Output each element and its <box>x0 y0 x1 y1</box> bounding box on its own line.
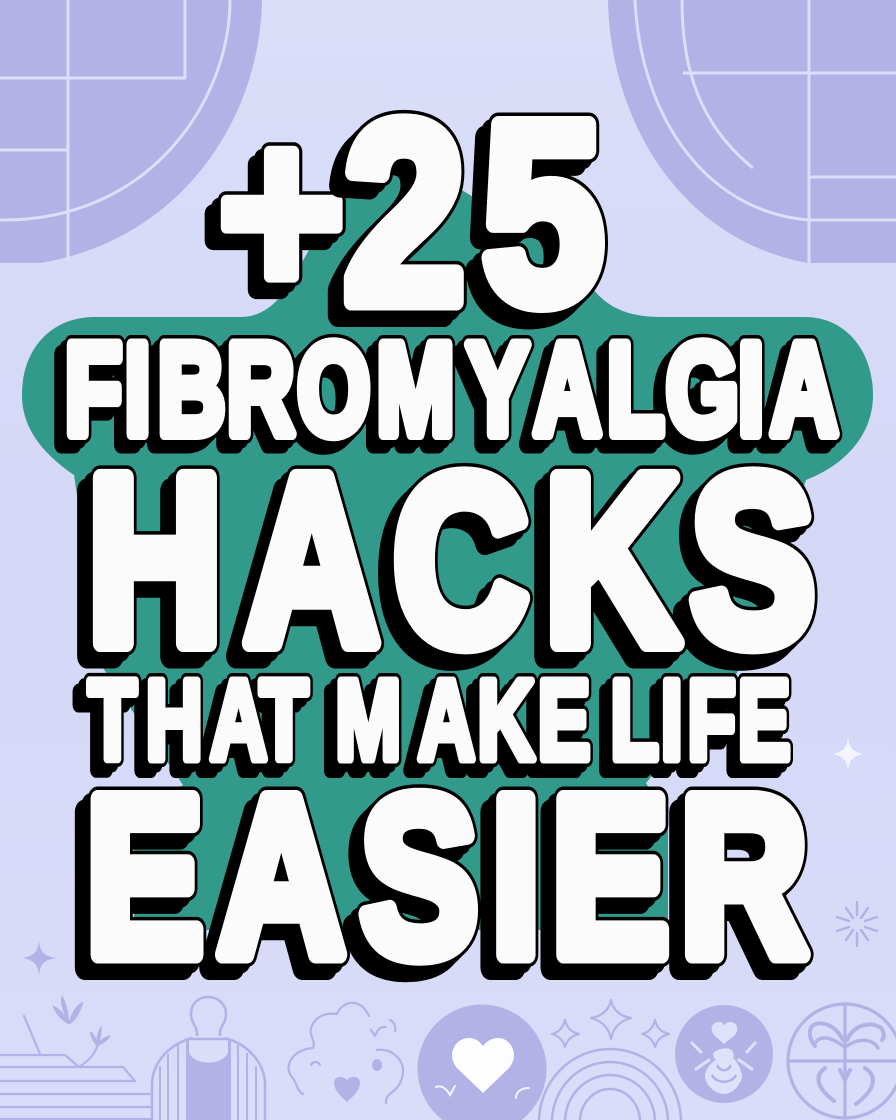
headline: THAT MAKE LIFE: THAT MAKE LIFE <box>88 657 791 783</box>
teal backdrop shape <box>22 159 873 930</box>
icon: person in striped cardigan <box>152 997 265 1120</box>
icon: circle with white heart <box>418 1004 546 1120</box>
headline: EASIER: EASIER <box>79 757 801 1009</box>
decorative arch: top left <box>0 0 262 263</box>
headline: EASIER: EASIER <box>86 750 807 1002</box>
sparkle: white right <box>832 737 864 771</box>
headline: +25 plus sign: + <box>204 86 333 362</box>
headline: FIBROMYALGIA: FIBROMYALGIA <box>65 317 838 463</box>
headline: HACKS: HACKS <box>74 439 802 707</box>
headline: THAT MAKE LIFE: THAT MAKE LIFE <box>88 657 791 783</box>
headline: +25 digits: 25 <box>330 81 591 370</box>
headline: EASIER: EASIER <box>86 750 807 1002</box>
icon: burst <box>837 902 877 946</box>
icon: palm tree in circle <box>788 1004 896 1118</box>
headline: EASIER: EASIER <box>73 763 794 1015</box>
headline: +25 plus sign: + <box>217 73 346 349</box>
icon: sparkle outlines <box>552 1000 669 1047</box>
headline: HACKS: HACKS <box>87 426 815 694</box>
headline: THAT MAKE LIFE: THAT MAKE LIFE <box>83 663 785 789</box>
headline: HACKS: HACKS <box>87 426 815 694</box>
icon: stairs with sprouts <box>0 996 152 1119</box>
headline: FIBROMYALGIA: FIBROMYALGIA <box>65 317 838 463</box>
headline: FIBROMYALGIA: FIBROMYALGIA <box>55 327 828 473</box>
headline: THAT MAKE LIFE: THAT MAKE LIFE <box>77 668 780 794</box>
decorative arch: top right <box>608 0 896 263</box>
icon: circle with heart and bee <box>675 1005 773 1103</box>
headline: +25 digits: 25 <box>343 68 604 357</box>
icon: cloud with heart <box>289 1003 403 1103</box>
headline: +25 plus sign: + <box>217 73 346 349</box>
headline: +25 digits: 25 <box>337 75 597 363</box>
sparkle: lavender left <box>22 940 56 976</box>
headline: +25 digits: 25 <box>343 68 604 357</box>
headline: FIBROMYALGIA: FIBROMYALGIA <box>60 322 833 468</box>
headline: HACKS: HACKS <box>81 432 809 701</box>
headline: +25 plus sign: + <box>210 80 340 355</box>
icon: rainbow arches <box>539 1049 681 1120</box>
